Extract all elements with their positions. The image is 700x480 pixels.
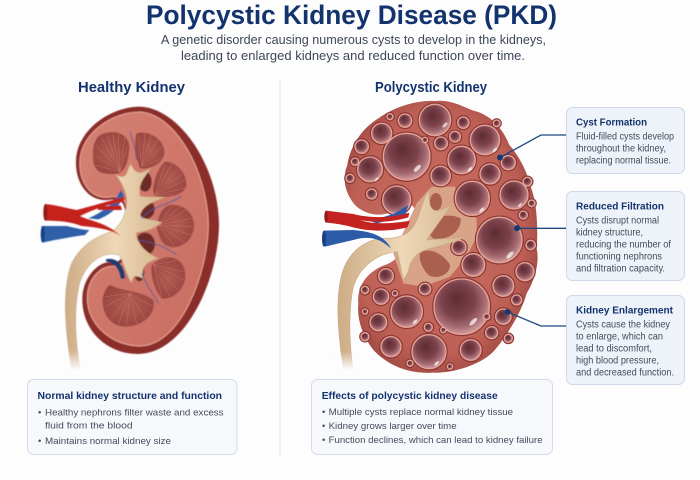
kidney capsule <box>76 107 219 354</box>
kidney cortex <box>80 112 208 346</box>
connector: kidney enlargement <box>504 309 567 326</box>
pyramid striations <box>94 133 193 326</box>
panel: effects of polycystic kidney disease: • <box>322 407 325 418</box>
panel: effects of polycystic kidney disease: Kidney grows larger over time <box>329 421 457 432</box>
ureter fade <box>62 350 87 371</box>
panel: normal kidney structure and function: Normal kidney structure and function <box>38 390 222 402</box>
panel: normal kidney structure and function: • <box>38 408 41 418</box>
callout: kidney enlargement: and decreased function. <box>576 367 674 378</box>
callout: cyst formation: Cyst Formation <box>576 117 647 129</box>
heading: healthy kidney: Healthy Kidney <box>78 79 186 96</box>
renal pelvis and ureter <box>65 164 165 368</box>
panel: effects of polycystic kidney disease: Multiple cysts replace normal kidney tissue <box>329 407 513 418</box>
heading: polycystic kidney: Polycystic Kidney <box>375 79 488 96</box>
callout: kidney enlargement: lead to discomfort, <box>576 343 652 354</box>
callout: cyst formation: Fluid-filled cysts develop <box>576 131 674 142</box>
callout: reduced filtration: kidney structure, <box>576 227 643 238</box>
panel: effects of polycystic kidney disease <box>312 380 552 454</box>
calyx openings <box>106 172 155 281</box>
kidney body <box>345 101 538 373</box>
cysts <box>346 104 535 369</box>
subtitle <box>161 32 546 63</box>
callout: reduced filtration: functioning nephrons <box>576 251 662 262</box>
blue vein <box>324 205 408 249</box>
panel: normal kidney structure and function: fluid from the blood <box>45 421 133 432</box>
exposed tissue patches <box>420 193 461 277</box>
callout: kidney enlargement: Cysts cause the kidney <box>576 319 670 330</box>
panel: effects of polycystic kidney disease: Effects of polycystic kidney disease <box>322 390 498 402</box>
callout: cyst formation <box>566 108 684 174</box>
red artery <box>326 211 410 231</box>
ureter fade <box>335 352 358 370</box>
callout: kidney enlargement: to enlarge, which can <box>576 331 663 342</box>
panel: effects of polycystic kidney disease: Function declines, which can lead to kidney failure <box>329 435 543 446</box>
subtitle: leading to enlarged kidneys and reduced function over time. <box>181 48 525 63</box>
callout: reduced filtration: reducing the number of <box>576 239 671 250</box>
small vessels <box>130 132 182 303</box>
renal pyramids <box>93 132 194 327</box>
callout: cyst formation: throughout the kidney, <box>576 143 666 154</box>
callout: reduced filtration: Reduced Filtration <box>576 201 664 213</box>
panel: effects of polycystic kidney disease: • <box>322 435 325 446</box>
callout: reduced filtration <box>566 192 684 280</box>
panel: normal kidney structure and function: Healthy nephrons filter waste and excess <box>45 408 224 418</box>
callout: reduced filtration: and filtration capacity. <box>576 263 665 274</box>
illustration: healthy kidney <box>41 107 219 371</box>
title: Polycystic Kidney Disease (PKD) <box>146 0 557 30</box>
callout: cyst formation: replacing normal tissue. <box>576 155 671 166</box>
tan fibrous core <box>393 187 477 287</box>
subtitle: A genetic disorder causing numerous cysts to develop in the kidneys, <box>161 32 546 47</box>
callout: kidney enlargement: Kidney Enlargement <box>576 305 673 317</box>
callout: reduced filtration: Cysts disrupt normal <box>576 215 659 226</box>
callout: kidney enlargement: high blood pressure, <box>576 355 659 366</box>
callout: kidney enlargement <box>566 296 684 384</box>
panel: effects of polycystic kidney disease: • <box>322 421 325 432</box>
illustration: polycystic kidney <box>322 101 538 373</box>
panel: normal kidney structure and function <box>28 380 237 454</box>
blue vein <box>42 190 124 243</box>
connector: reduced filtration <box>514 225 567 231</box>
pelvis and ureter <box>338 190 467 368</box>
cyst highlights <box>374 122 522 366</box>
panel: normal kidney structure and function: • <box>38 436 41 447</box>
red artery <box>45 197 125 236</box>
panel: normal kidney structure and function: Maintains normal kidney size <box>45 436 171 447</box>
connector: cyst formation <box>497 135 567 160</box>
